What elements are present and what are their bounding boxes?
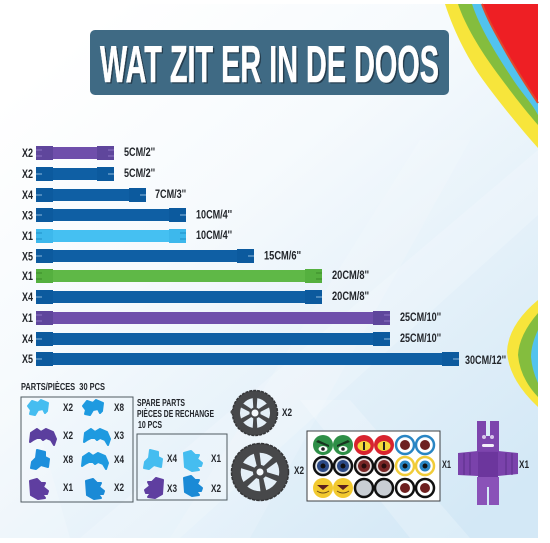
bar row: blue 30cm: 30CM/12'': [465, 355, 506, 367]
bar row: purple 25cm: 25CM/10'': [400, 312, 441, 324]
icon: small wheel: X2: [282, 407, 292, 419]
decoration: right rainbow curve: [507, 300, 538, 407]
bar row: blue 15cm: 15CM/6'': [264, 250, 301, 262]
panel: parts: X3: [114, 430, 124, 442]
bar row: blue 7cm: X4: [22, 190, 33, 202]
bar row: green 20cm: X1: [22, 271, 33, 283]
panel: spare parts: [137, 397, 227, 500]
bar row: blue 5cm: [22, 167, 155, 181]
bar row: blue 15cm: X5: [22, 252, 33, 264]
panel: parts: X4: [114, 454, 125, 466]
row 3: [313, 478, 434, 498]
bar row: purple 5cm: 5CM/2'': [124, 147, 155, 159]
bar row: purple 25cm: [22, 311, 441, 325]
icon: purple creature: [458, 421, 529, 505]
row 1: [313, 435, 434, 455]
bar row: blue 10cm: X3: [22, 210, 33, 222]
bar row: blue 25cm: [22, 332, 441, 346]
bar row: light blue 10cm: 10CM/4'': [196, 230, 232, 242]
panel: spare parts: X2: [211, 483, 221, 495]
panel: eye stickers: X1: [442, 459, 451, 471]
bar row: blue 10cm: 10CM/4'': [196, 210, 232, 222]
panel: parts: X8: [114, 402, 124, 414]
bar row: blue 20cm: [22, 290, 369, 304]
bar row: light blue 10cm: X1: [22, 231, 33, 243]
bar row: green 20cm: [22, 269, 369, 283]
panel: parts: PARTS/PIÈCES 30 PCS: [21, 380, 105, 393]
panel: spare parts: X1: [211, 453, 221, 465]
panel: spare parts: X3: [167, 483, 177, 495]
panel: parts: X2: [114, 482, 124, 494]
row 2: [314, 457, 434, 475]
panel: spare parts: SPARE PARTS: [137, 397, 185, 409]
bar row: purple 25cm: X1: [22, 313, 33, 325]
bar row: blue 20cm: 20CM/8'': [332, 291, 369, 303]
bar row: blue 5cm: 5CM/2'': [124, 168, 155, 180]
bar row: blue 25cm: 25CM/10'': [400, 333, 441, 345]
title banner: [90, 30, 449, 96]
bar row: blue 30cm: X5: [22, 354, 33, 366]
panel: spare parts: X4: [167, 453, 178, 465]
bar row: blue 7cm: 7CM/3'': [155, 189, 186, 201]
bar row: purple 5cm: [22, 146, 155, 160]
icon: large wheel: [232, 444, 304, 500]
bar row: blue 7cm: [22, 188, 186, 202]
bar row: blue 15cm: [22, 249, 301, 264]
panel: parts: X8: [63, 454, 73, 466]
icon: small wheel: [230, 390, 292, 436]
panel: parts: X1: [63, 482, 73, 494]
icon: large wheel: X2: [294, 465, 304, 477]
panel: eye stickers: [307, 431, 451, 501]
bar row: blue 10cm: [22, 208, 232, 222]
decoration: top right rainbow curve: [445, 4, 538, 148]
bar row: blue 20cm: X4: [22, 292, 33, 304]
bar row: blue 30cm: [22, 352, 506, 367]
panel: parts: [21, 380, 133, 502]
panel: parts: X2: [63, 402, 73, 414]
bar row: light blue 10cm: [22, 229, 232, 243]
bar row: green 20cm: 20CM/8'': [332, 270, 369, 282]
panel: spare parts: PIÈCES DE RECHANGE: [137, 407, 214, 420]
panel: parts: X2: [63, 430, 73, 442]
bar row: purple 5cm: X2: [22, 148, 33, 160]
bar row: blue 25cm: X4: [22, 334, 33, 346]
icon: purple creature: X1: [519, 459, 529, 471]
panel: spare parts: 10 PCS: [138, 419, 162, 431]
bar row: blue 5cm: X2: [22, 169, 33, 181]
